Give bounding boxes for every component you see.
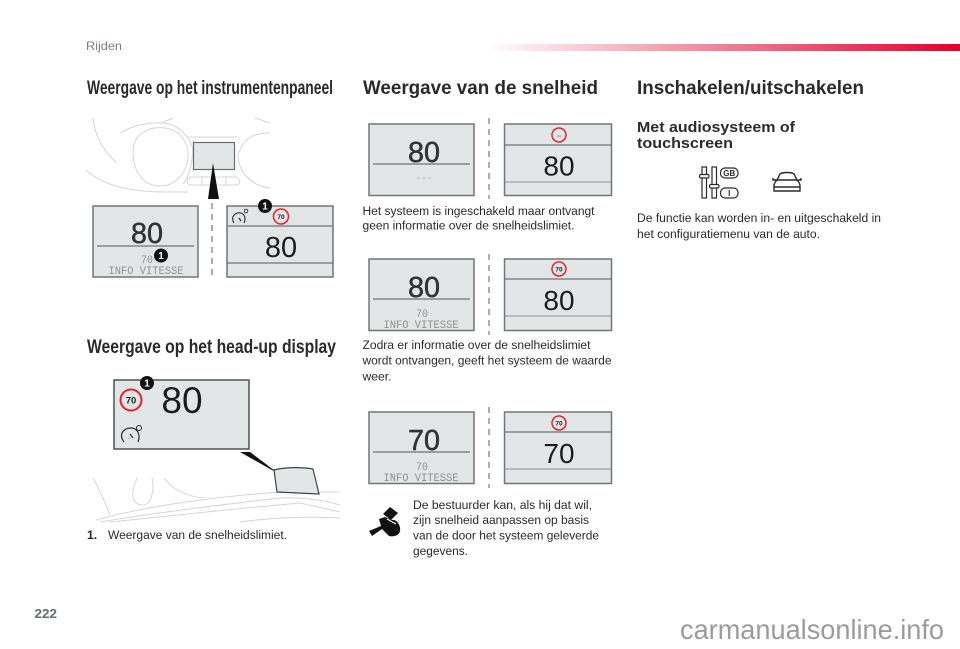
head-up screen (274, 468, 319, 494)
row 3: displays adjusted speed (369, 407, 612, 488)
text: no information: Het systeem is ingeschakeld maar ontvangt (362, 204, 595, 218)
legend: item 1: Weergave van de snelheidslimiet. (108, 528, 287, 542)
text: configuration: De functie kan worden in- en uitgeschakeld in (637, 211, 881, 225)
right display: 70 (555, 420, 563, 428)
left display: 70 (408, 425, 440, 457)
left display: INFO VITESSE (384, 473, 459, 485)
right display (504, 412, 612, 484)
watermark: carmanualsonline.info (680, 614, 944, 645)
left display: 70 (416, 309, 428, 321)
subheading: audiosysteem: touchscreen (637, 135, 733, 152)
speed sign: 70 (126, 396, 136, 406)
heading: snelheid: Weergave van de snelheid (363, 78, 598, 99)
text: driver advice: De bestuurder kan, als hij dat wil, (413, 498, 592, 512)
row 1: displays no information (369, 118, 612, 199)
section label: Rijden: Rijden (86, 39, 122, 53)
icon: settings sliders (700, 167, 738, 198)
text: limit received (362, 338, 612, 384)
text: driver advice: van de door het systeem geleverde (413, 528, 599, 542)
legend: item 1: 1. (87, 528, 97, 542)
badge 1: 1 (158, 251, 164, 262)
display: instrument left: INFO VITESSE (108, 266, 184, 278)
left display: --- (415, 173, 433, 185)
left display: 70 (416, 462, 428, 474)
display: head-up (114, 376, 249, 449)
right display: 70 (543, 438, 575, 469)
text: limit received: Zodra er informatie over de snelheidslimiet (362, 338, 591, 352)
right display (504, 259, 612, 330)
badge 1: 1 (262, 202, 268, 212)
badge 1: 1 (144, 378, 150, 390)
left display (369, 259, 474, 332)
text: driver advice: zijn snelheid aanpassen op basis (413, 513, 589, 527)
right display (504, 124, 612, 196)
icon: car (773, 172, 801, 191)
left display: 80 (408, 137, 440, 169)
screen (194, 142, 234, 170)
arrow wedge (240, 452, 279, 474)
heading: head-up display: Weergave op het head-up display (87, 337, 336, 358)
page number: 222 (34, 606, 57, 621)
left display: 80 (408, 272, 440, 304)
text: no information (362, 204, 595, 232)
left display: INFO VITESSE (384, 320, 459, 332)
display: instrument left (93, 206, 198, 278)
display: instrument right: 80 (265, 232, 297, 264)
header gradient bar (485, 44, 960, 51)
icon: settings sliders: GB (723, 169, 736, 178)
display: head-up: 80 (161, 380, 203, 421)
row 2: displays limit received (369, 254, 612, 335)
icon: gauge (233, 209, 248, 223)
arrow (208, 163, 219, 199)
right display: 70 (555, 266, 563, 274)
icon: hand (369, 507, 400, 536)
right display: 80 (543, 150, 575, 182)
right display: -- (557, 133, 562, 140)
illustration: head-up windscreen (93, 452, 340, 522)
icon: settings sliders: I (728, 189, 730, 198)
text: driver advice (413, 498, 599, 558)
left display (369, 412, 474, 485)
illustration: instrument panel (86, 118, 270, 280)
icon: gauge (122, 426, 142, 442)
heading: inschakelen: Inschakelen/uitschakelen (637, 78, 864, 99)
right display: 80 (543, 285, 575, 316)
subheading: audiosysteem: Met audiosysteem of (637, 119, 796, 136)
text: configuration (637, 211, 881, 241)
speed sign: 70 (277, 214, 285, 221)
text: no information: geen informatie over de snelheidslimiet. (362, 218, 574, 232)
heading: instrumentenpaneel: Weergave op het instrumentenpaneel (87, 78, 333, 99)
left display (369, 124, 474, 196)
text: driver advice: gegevens. (413, 544, 468, 558)
subheading: audiosysteem (637, 119, 796, 152)
text: limit received: weer. (362, 370, 392, 384)
display: instrument left: 70 (141, 255, 153, 267)
text: configuration: het configuratiemenu van de auto. (637, 227, 820, 241)
display: instrument right (227, 199, 333, 277)
display: instrument left: 80 (131, 218, 163, 250)
text: limit received: wordt ontvangen, geeft het systeem de waarde (362, 354, 612, 368)
